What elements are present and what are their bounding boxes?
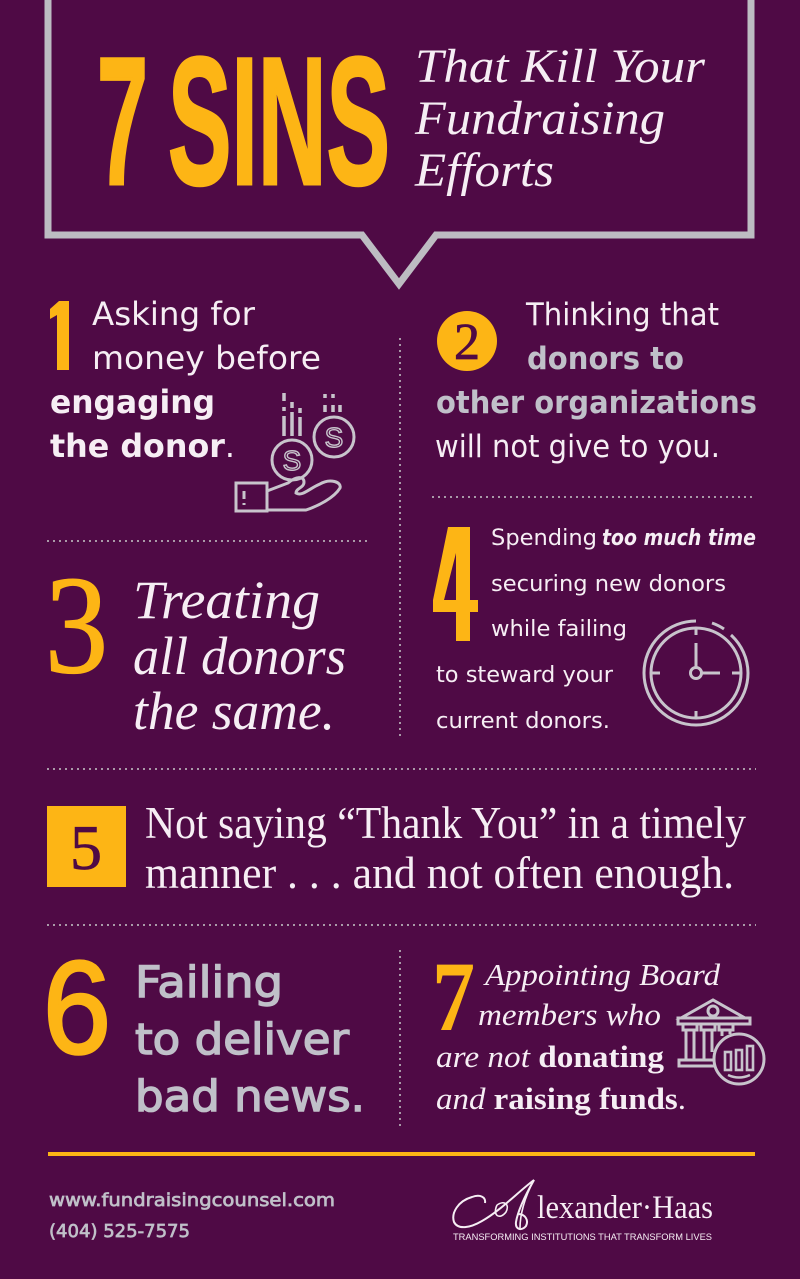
sin 5 text: Not saying “Thank You” in a timely bbox=[145, 798, 746, 848]
subtitle bbox=[414, 40, 705, 197]
subtitle: That Kill Your bbox=[415, 40, 705, 93]
number 2 badge bbox=[437, 311, 497, 371]
subtitle: Efforts bbox=[414, 144, 554, 197]
sin 2 bbox=[435, 297, 757, 465]
sin 2 text: donors to bbox=[527, 341, 684, 377]
number 5 badge bbox=[47, 806, 126, 887]
sin 6 text bbox=[135, 958, 365, 1122]
footer contact bbox=[49, 1190, 335, 1242]
sin 1 text bbox=[50, 295, 321, 465]
icon: clock bbox=[644, 621, 748, 725]
sin 7 text: Appointing Board bbox=[483, 957, 721, 992]
title: 7 SINS bbox=[97, 19, 390, 223]
number 4 bbox=[433, 527, 478, 641]
footer rule bbox=[48, 1152, 755, 1156]
sin 4 text bbox=[436, 526, 756, 734]
sin 4 text: to steward your bbox=[436, 663, 614, 688]
sin 6 text: Failing bbox=[135, 958, 283, 1008]
logo: Alexander Haas: lexander·Haas bbox=[537, 1190, 713, 1226]
number 3: 3 bbox=[45, 548, 108, 703]
sin 4 text: current donors. bbox=[436, 709, 610, 734]
sin 3 text bbox=[133, 570, 346, 741]
sin 1 bbox=[50, 295, 354, 511]
sin 1 text: engaging bbox=[50, 383, 215, 421]
logo: Alexander Haas: TRANSFORMING INSTITUTIONS THAT TRANSFORM LIVES bbox=[453, 1232, 712, 1243]
sin 3 bbox=[45, 548, 346, 741]
sin 7 text bbox=[436, 957, 721, 1116]
sin 7 text: are not donating bbox=[436, 1039, 665, 1074]
sin 2 text: will not give to you. bbox=[435, 429, 720, 465]
sin 4 text: too much time bbox=[602, 526, 756, 551]
sin 3 text: the same. bbox=[133, 681, 335, 741]
icon: coins falling into hand: S bbox=[325, 422, 343, 453]
sin 3 text: all donors bbox=[133, 626, 346, 686]
sin 7 bbox=[432, 941, 764, 1116]
number 2 badge: 2 bbox=[454, 314, 480, 371]
sin 4 text: securing new donors bbox=[491, 572, 726, 597]
sin 7 text: members who bbox=[478, 997, 661, 1032]
sin 3 text: Treating bbox=[133, 570, 320, 630]
speech bubble header panel bbox=[48, 0, 751, 284]
sin 6 text: to deliver bbox=[135, 1015, 349, 1065]
footer contact: www.fundraisingcounsel.com bbox=[49, 1190, 335, 1211]
title: 7 SINS: 7 bbox=[97, 19, 148, 223]
sin 6 bbox=[43, 934, 365, 1122]
title: 7 SINS: SINS bbox=[168, 19, 390, 223]
icon: coins falling into hand: S bbox=[283, 445, 301, 476]
icon: bank with chart bbox=[678, 1000, 764, 1084]
sin 2 text: other organizations bbox=[436, 385, 757, 421]
sin 4 bbox=[433, 526, 756, 734]
number 5 badge: 5 bbox=[70, 812, 102, 883]
icon: coins falling into hand bbox=[236, 393, 354, 511]
sin 7 text: and raising funds . bbox=[436, 1081, 686, 1116]
sin 1 text: Asking for bbox=[92, 295, 256, 333]
sin 1 text: the donor. bbox=[50, 427, 235, 465]
sin 4 text: while failing bbox=[491, 617, 627, 642]
number 6: 6 bbox=[43, 934, 111, 1081]
subtitle: Fundraising bbox=[414, 92, 665, 145]
sin 5 text bbox=[145, 798, 746, 898]
sin 5 text: manner . . . and not often enough. bbox=[145, 848, 734, 898]
number 7: 7 bbox=[432, 941, 475, 1052]
sin 2 text: Thinking that bbox=[525, 297, 719, 333]
logo: Alexander Haas bbox=[453, 1180, 713, 1243]
sin 6 text: bad news. bbox=[135, 1072, 365, 1122]
number 1 bbox=[50, 301, 69, 370]
sin 5 bbox=[47, 798, 746, 898]
sin 1 text: money before bbox=[92, 339, 321, 377]
footer contact: (404) 525-7575 bbox=[49, 1221, 190, 1242]
sin 2 text bbox=[435, 297, 757, 465]
sin 4 text: Spending bbox=[491, 526, 597, 551]
